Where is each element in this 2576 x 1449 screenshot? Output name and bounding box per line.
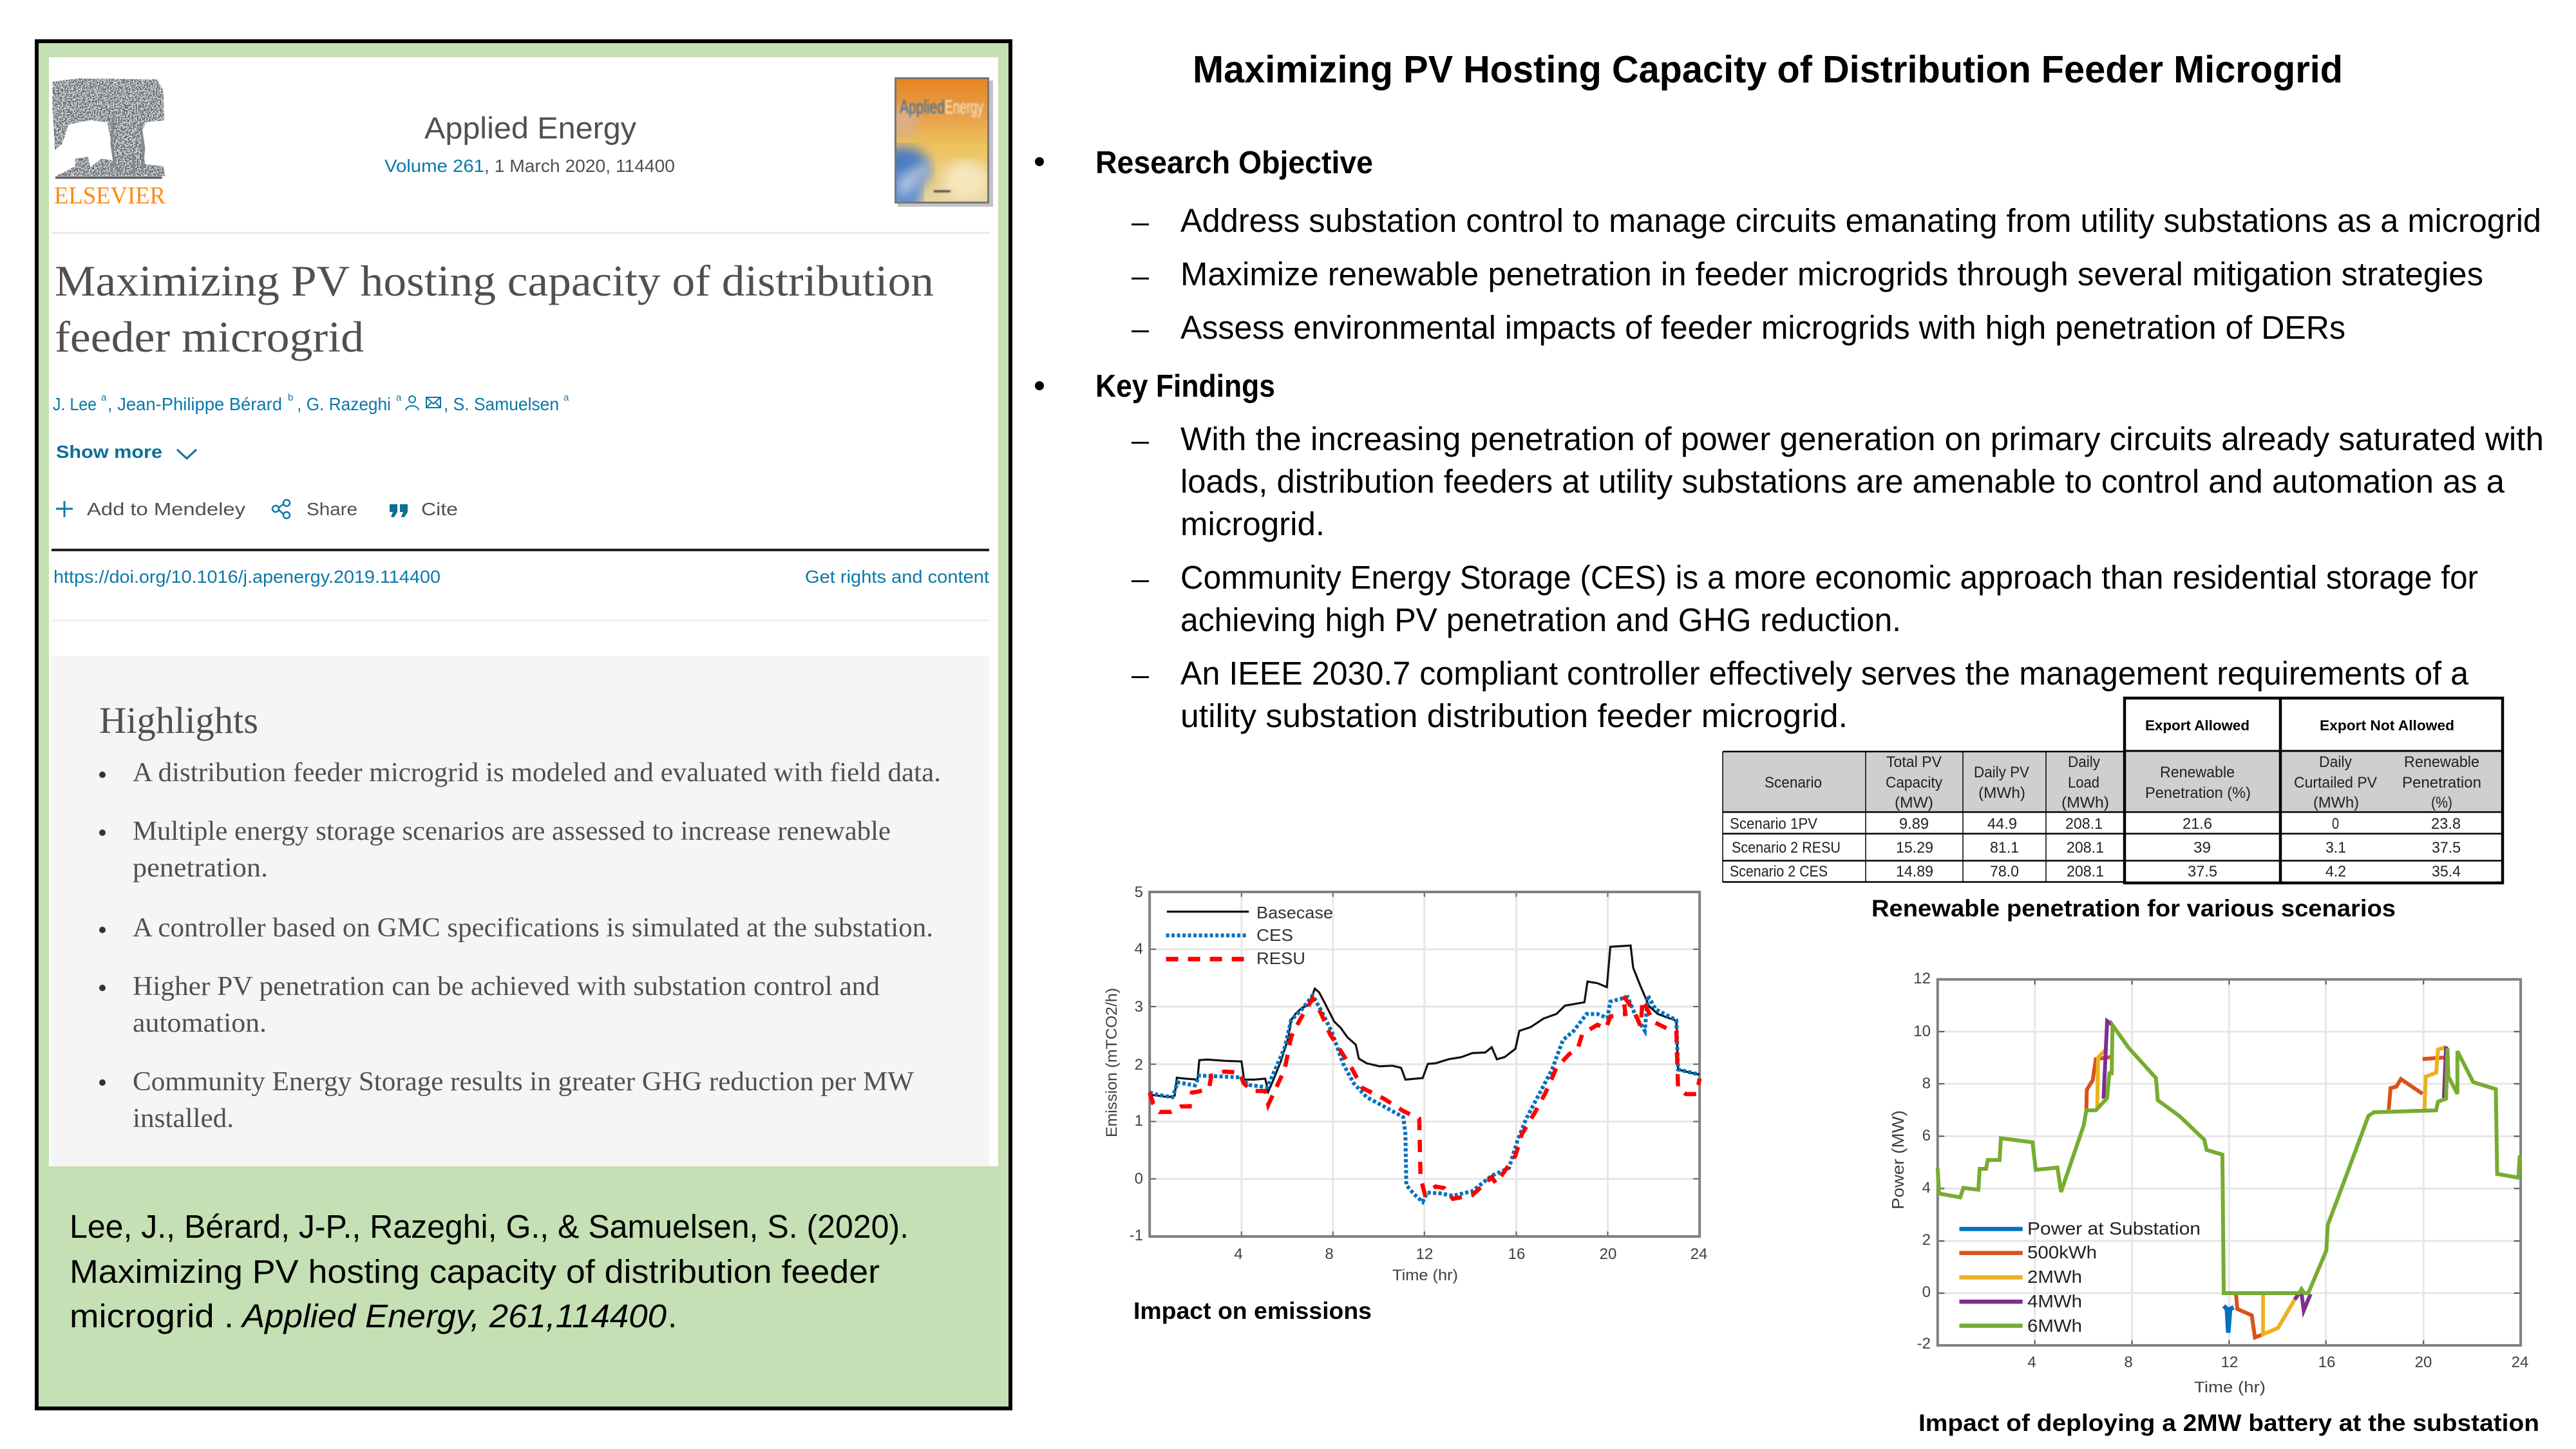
text block: key findings	[1035, 369, 2544, 734]
text block: key findings: An IEEE 2030.7 compliant controller effectively serves the management requirements of a	[1180, 655, 2469, 692]
text: table rows: 9.89	[1899, 815, 1929, 833]
list: highlight bullets: A controller based on GMC specifications is simulated at the substation.	[133, 913, 933, 943]
list: highlight bullets: installed.	[133, 1104, 234, 1133]
axis labels: x ticks: 8	[1325, 1245, 1334, 1263]
text: column headers: Penetration (%)	[2145, 784, 2251, 802]
text: table rows: 78.0	[1990, 863, 2019, 880]
text block: research objective: Address substation control to manage circuits emanating from utility substations as a microgrid	[1180, 202, 2541, 239]
text block: key findings: Community Energy Storage (CES) is a more economic approach than residential storage for	[1180, 559, 2478, 596]
axis labels: y ticks: 0	[1135, 1170, 1143, 1188]
text: table rows: Scenario 2 RESU	[1732, 839, 1841, 857]
text block: key findings: With the increasing penetration of power generation on primary circuits already saturated with	[1180, 421, 2544, 457]
text: column headers: (MWh)	[1978, 784, 2025, 802]
heading: key findings: Key Findings	[1095, 369, 1275, 404]
text: authors: b	[288, 392, 293, 403]
axis labels: y ticks: 3	[1135, 998, 1143, 1016]
caption: emissions chart: Impact on emissions	[1133, 1298, 1372, 1324]
legend: labels: Basecase	[1256, 903, 1333, 922]
line: 4MWh	[2103, 1021, 2446, 1311]
text block: key findings: loads, distribution feeders at utility substations are amenable to control and automation as a	[1180, 463, 2505, 500]
text: table rows: 4.2	[2325, 863, 2346, 880]
text: journal volume: , 1 March 2020, 114400	[484, 156, 675, 176]
legend: labels: Power at Substation	[2027, 1218, 2201, 1238]
axis title: time: Time (hr)	[1392, 1267, 1458, 1284]
axis labels: y ticks: 10	[1913, 1023, 1931, 1040]
text: citation: Applied Energy, 261,114400	[240, 1298, 667, 1334]
text: authors	[53, 392, 569, 414]
text: ELSEVIER wordmark: ELSEVIER	[54, 182, 166, 209]
toolbar: add, share and cite: Add to Mendeley	[87, 499, 245, 519]
axis title: time: Time (hr)	[2194, 1379, 2266, 1396]
text: column headers: Renewable	[2404, 753, 2479, 771]
icon: journal cover	[895, 77, 993, 207]
text: column headers: Total PV	[1886, 753, 1942, 771]
line chart: impact on emissions	[1103, 884, 1707, 1284]
text: table rows: 21.6	[2183, 815, 2212, 833]
list: highlight bullets: automation.	[133, 1009, 267, 1038]
toolbar: add, share and cite: Cite	[421, 499, 458, 519]
text: column headers: Load	[2068, 774, 2099, 791]
line: basecase	[1150, 945, 1700, 1097]
axis labels: x ticks: 24	[2512, 1354, 2528, 1371]
text: show more	[56, 442, 196, 462]
axis labels: x ticks: 12	[1416, 1245, 1433, 1263]
axis labels: y ticks: 4	[1135, 940, 1143, 958]
text block: research objective: Assess environmental impacts of feeder microgrids with high penetration of DERs	[1180, 309, 2345, 346]
legend: labels	[2027, 1218, 2201, 1336]
line: 500kWh	[2087, 1057, 2444, 1338]
legend: labels: RESU	[1256, 949, 1305, 968]
text: column headers: Daily PV	[1974, 764, 2029, 781]
axis labels: y ticks: 6	[1922, 1127, 1931, 1144]
text: column headers: (%)	[2431, 794, 2452, 811]
text: table rows: 81.1	[1990, 839, 2019, 857]
axis labels: x ticks: 20	[2415, 1354, 2432, 1371]
toolbar: add, share and cite: Share	[307, 499, 357, 519]
text: citation: microgrid .	[70, 1298, 234, 1334]
text: journal volume: Volume 261	[384, 156, 484, 176]
text: table rows: 39	[2193, 839, 2211, 857]
axis labels: x ticks	[1234, 1245, 1707, 1263]
text: column headers: Capacity	[1886, 774, 1942, 791]
text: journal name: Applied Energy	[424, 111, 637, 145]
text: authors: , G. Razeghi	[297, 394, 391, 414]
axis labels: y ticks: 8	[1922, 1075, 1931, 1092]
axis labels: y ticks: 2	[1922, 1231, 1931, 1249]
text: table rows: 0	[2332, 815, 2339, 833]
text block: research objective	[1035, 146, 2541, 346]
axis labels: y ticks: 4	[1922, 1179, 1931, 1197]
text: show more: Show more	[56, 442, 162, 462]
text: column headers: Curtailed PV	[2294, 774, 2377, 791]
legend: labels: 4MWh	[2027, 1291, 2082, 1311]
list: highlight bullets	[99, 758, 941, 1133]
text: column headers: Penetration	[2402, 774, 2481, 791]
text: table rows: 37.5	[2432, 839, 2461, 857]
legend: labels: 6MWh	[2027, 1316, 2082, 1336]
text block: key findings: utility substation distribution feeder microgrid.	[1180, 697, 1848, 734]
text: column headers: (MWh)	[2061, 794, 2109, 811]
axis title: power: Power (MW)	[1888, 1110, 1908, 1209]
legend: labels: 2MWh	[2027, 1267, 2082, 1287]
line: power at substation	[2224, 1306, 2233, 1332]
axis labels: y ticks: 5	[1135, 884, 1143, 901]
legend: labels: CES	[1256, 925, 1293, 945]
text: table rows: Scenario 2 CES	[1730, 863, 1828, 880]
icon: plus	[56, 501, 73, 517]
icon: share	[272, 500, 290, 518]
text: table rows: Scenario 1PV	[1730, 815, 1817, 833]
heading: highlights: Highlights	[99, 699, 258, 741]
caption: battery chart: Impact of deploying a 2MW battery at the substation	[1918, 1410, 2539, 1436]
axis labels: y ticks: -2	[1917, 1335, 1931, 1352]
axis labels: x ticks: 4	[1234, 1245, 1243, 1263]
text: citation: Maximizing PV hosting capacity of distribution feeder	[70, 1253, 880, 1290]
table: renewable penetration	[1723, 698, 2504, 883]
icon: person	[406, 396, 419, 410]
axis labels: x ticks: 12	[2221, 1354, 2238, 1371]
heading: research objective: Research Objective	[1095, 146, 1373, 180]
axis labels: y ticks: 12	[1913, 970, 1931, 987]
toolbar: add, share and cite	[56, 499, 458, 519]
text: table rows: 208.1	[2067, 839, 2104, 857]
heading: article title	[55, 256, 934, 361]
text: rights link: Get rights and content	[805, 567, 989, 587]
list: highlight bullets: A distribution feeder microgrid is modeled and evaluated with field data.	[133, 758, 941, 788]
axis labels: y ticks	[1130, 884, 1143, 1244]
axis labels: x ticks: 20	[1600, 1245, 1616, 1263]
axis labels: y ticks: -1	[1130, 1227, 1143, 1244]
icon: quotes	[390, 504, 408, 517]
axis labels: x ticks: 16	[2318, 1354, 2335, 1371]
text: table rows: 37.5	[2188, 863, 2217, 880]
legend: labels: 500kWh	[2027, 1242, 2097, 1262]
list: highlight bullets: Multiple energy storage scenarios are assessed to increase renewable	[133, 817, 891, 846]
axis title: emission: Emission (mTCO2/h)	[1103, 988, 1121, 1137]
axis labels: x ticks: 16	[1508, 1245, 1525, 1263]
text block: key findings: microgrid.	[1180, 506, 1325, 542]
text block: research objective: Maximize renewable penetration in feeder microgrids through several mitigation strategies	[1180, 256, 2483, 292]
legend: line samples	[1959, 1229, 2023, 1326]
axis labels: y ticks	[1913, 970, 1931, 1352]
text: journal volume	[384, 156, 675, 176]
axis labels: y ticks: 2	[1135, 1056, 1143, 1074]
heading: article title: Maximizing PV hosting capacity of distribution	[55, 256, 934, 305]
text: column headers: (MWh)	[2313, 794, 2359, 811]
axis labels: x ticks: 24	[1690, 1245, 1707, 1263]
panel: paper summary	[37, 41, 1010, 1408]
icon: journal cover: Applied	[900, 97, 945, 118]
text: column headers	[1765, 753, 2481, 811]
text: authors: , S. Samuelsen	[444, 394, 559, 414]
list: highlight bullets: Community Energy Storage results in greater GHG reduction per MW	[133, 1067, 914, 1097]
text: column headers: Renewable	[2160, 764, 2235, 781]
icon: mail	[426, 397, 440, 408]
line: CES	[1150, 996, 1700, 1202]
text: column headers: Daily	[2319, 753, 2352, 771]
heading: article title: feeder microgrid	[55, 312, 364, 361]
axis labels: x ticks: 4	[2027, 1354, 2036, 1371]
icon: Elsevier tree logo	[53, 79, 166, 209]
text: citation	[70, 1208, 909, 1334]
text: authors: a	[396, 392, 402, 403]
text: authors: a	[101, 392, 107, 403]
text: table rows: 44.9	[1987, 815, 2017, 833]
panel: article page screenshot	[49, 57, 998, 1166]
line: 6MWh	[1938, 1025, 2520, 1293]
text: export headers: Export Not Allowed	[2320, 717, 2454, 734]
text: authors: J. Lee	[53, 394, 97, 414]
text: column headers: Scenario	[1765, 774, 1822, 791]
text: table rows: 208.1	[2065, 815, 2103, 833]
legend: line samples	[1166, 912, 1251, 959]
text: authors: a	[564, 392, 569, 403]
text: column headers: (MW)	[1895, 794, 1933, 811]
text: table rows: 208.1	[2067, 863, 2104, 880]
line chart: battery impact on substation power	[1888, 970, 2528, 1396]
text: citation: Lee, J., Bérard, J-P., Razeghi, G., & Samuelsen, S. (2020).	[70, 1208, 909, 1245]
text: table rows: 15.29	[1896, 839, 1933, 857]
icon: journal cover: Energy	[945, 97, 983, 118]
text: table rows: 14.89	[1896, 863, 1933, 880]
text: column headers: Daily	[2068, 753, 2100, 771]
axis labels: x ticks	[2027, 1354, 2528, 1371]
axis labels: y ticks: 1	[1135, 1112, 1143, 1130]
title: Maximizing PV Hosting Capacity of Distribution Feeder Microgrid	[1193, 48, 2343, 91]
text: table rows: 23.8	[2431, 815, 2461, 833]
list: highlight bullets: penetration.	[133, 853, 268, 883]
text: export headers: Export Allowed	[2145, 717, 2249, 734]
axis labels: y ticks: 0	[1922, 1283, 1931, 1301]
axis labels: x ticks: 8	[2124, 1354, 2133, 1371]
line: 2MWh	[2098, 1047, 2446, 1334]
panel: highlights	[52, 656, 989, 1166]
text block: key findings: achieving high PV penetration and GHG reduction.	[1180, 601, 1901, 638]
text: export headers	[2145, 717, 2454, 734]
text: table rows: 3.1	[2325, 839, 2346, 857]
caption: table: Renewable penetration for various scenarios	[1871, 895, 2396, 922]
text: table rows: 35.4	[2432, 863, 2461, 880]
text: authors: , Jean-Philippe Bérard	[108, 394, 282, 414]
text: table rows	[1730, 815, 2461, 880]
line: RESU	[1150, 996, 1700, 1199]
list: highlight bullets: Higher PV penetration can be achieved with substation control and	[133, 972, 880, 1001]
legend: labels	[1256, 903, 1333, 968]
text: doi link: https://doi.org/10.1016/j.apenergy.2019.114400	[53, 567, 440, 587]
text: citation: .	[668, 1298, 677, 1334]
